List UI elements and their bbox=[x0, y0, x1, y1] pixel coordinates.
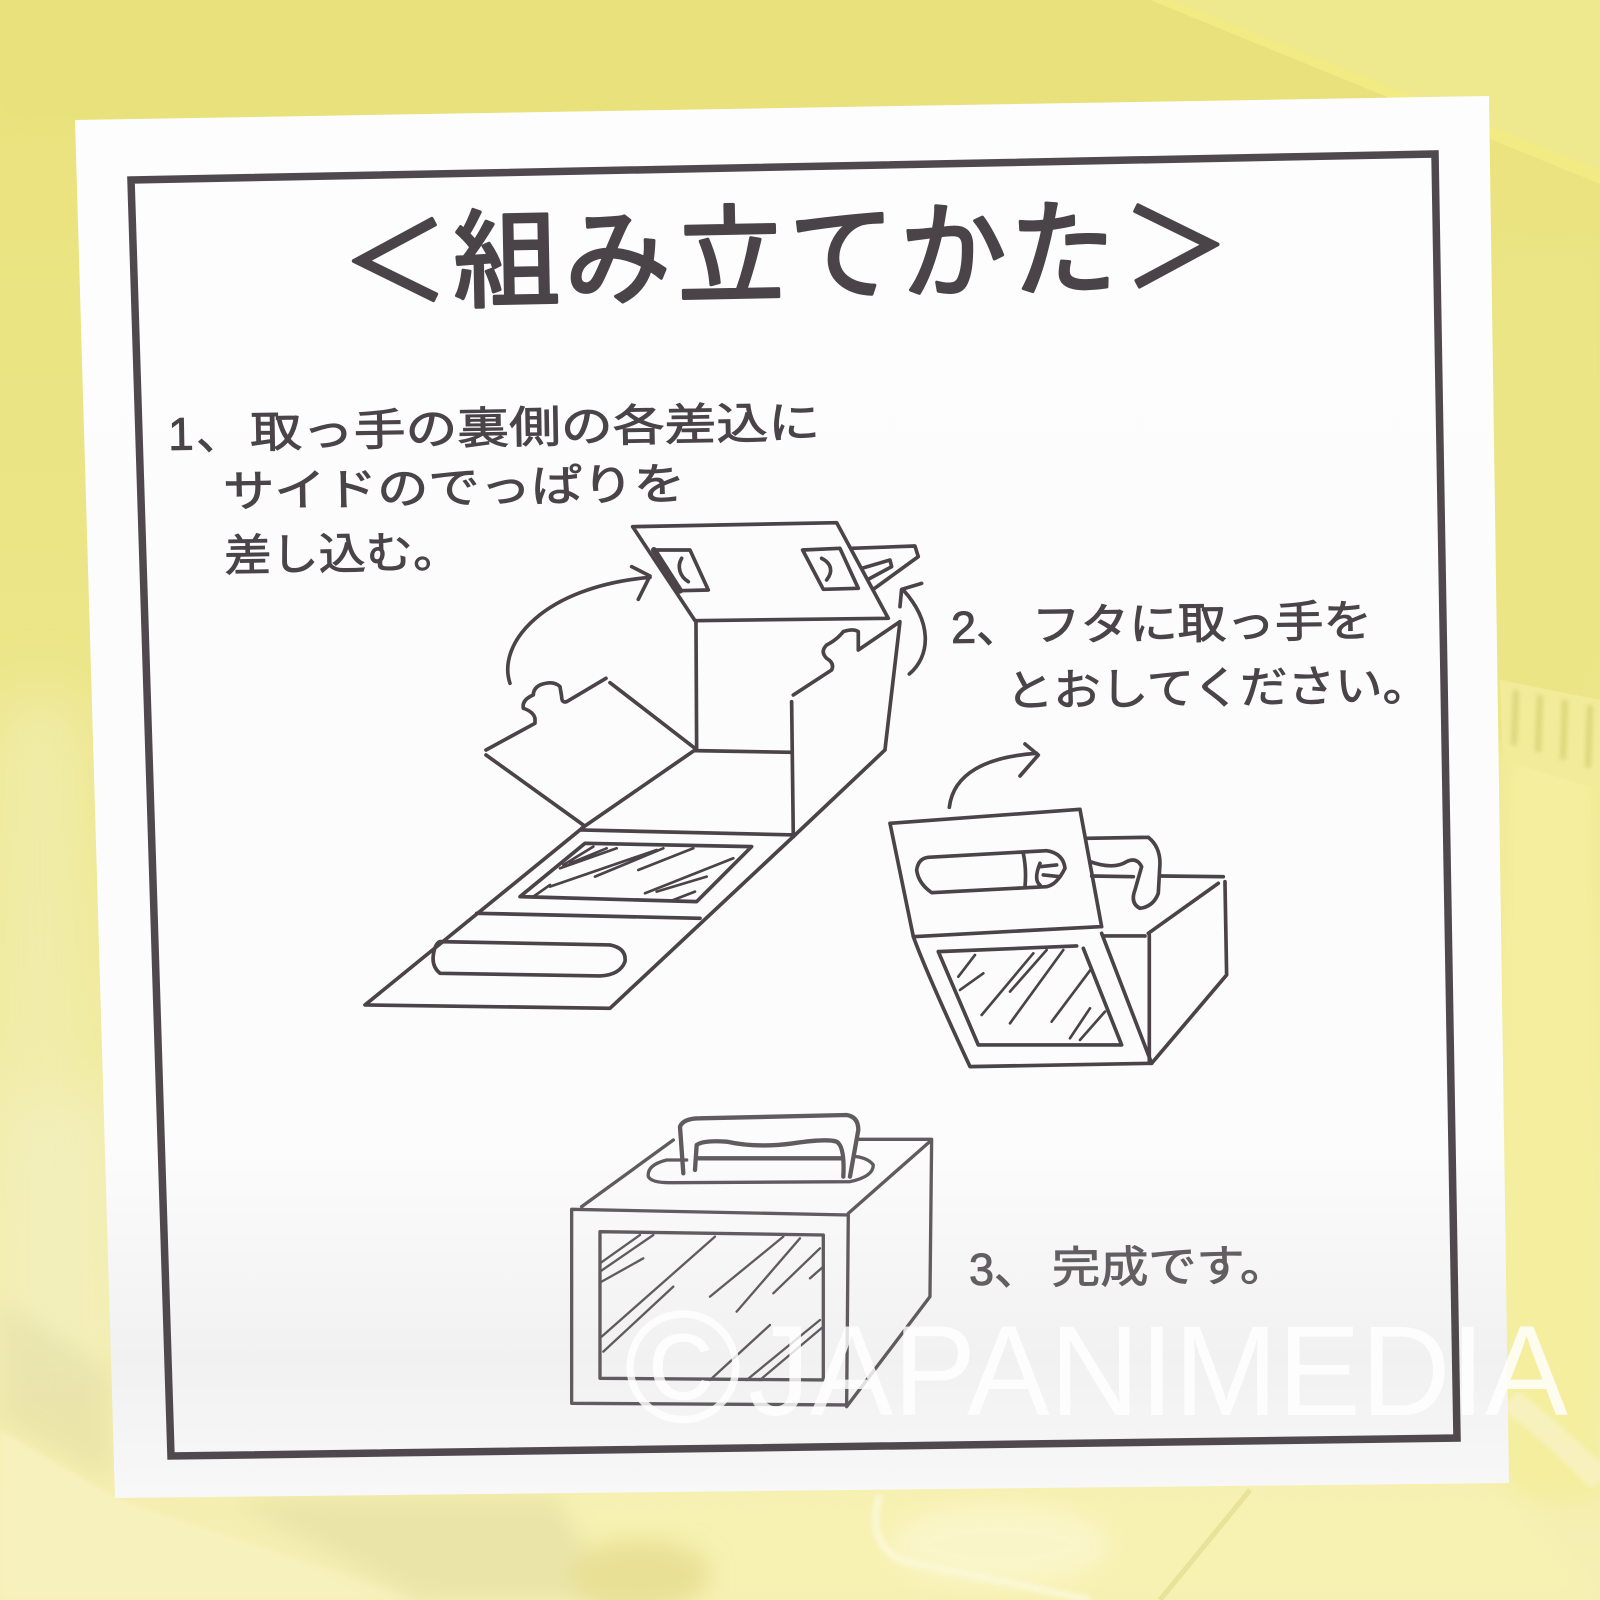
box outline bbox=[572, 1139, 932, 1407]
step 2 diagram: closing the lid bbox=[890, 744, 1227, 1067]
step 2 text: とおしてください。 bbox=[1006, 661, 1430, 716]
step 1 text: サイドのでっぱりを bbox=[223, 460, 685, 517]
window bbox=[600, 1232, 823, 1380]
step 2 text: 、 bbox=[976, 601, 1021, 653]
box body bbox=[1103, 882, 1227, 1063]
step 1 text: 取っ手の裏側の各差込に bbox=[250, 399, 820, 458]
frame border bbox=[131, 154, 1457, 1456]
handle bbox=[1087, 837, 1223, 908]
step 3 text: 完成です。 bbox=[1052, 1242, 1288, 1293]
step 1 diagram: unfolded box bbox=[365, 523, 925, 1008]
step 3 diagram: finished box bbox=[572, 1115, 932, 1407]
step 2 text: 2 bbox=[951, 602, 976, 653]
lid bbox=[890, 809, 1102, 937]
lid slot bbox=[917, 851, 1065, 893]
lid flap with handle slots bbox=[633, 523, 888, 621]
handle behind flap bbox=[852, 546, 918, 589]
box back wall and floor bbox=[580, 621, 795, 837]
window bbox=[938, 946, 1122, 1045]
step 2 text bbox=[951, 595, 1430, 717]
step 1 text: 差し込む。 bbox=[224, 528, 461, 581]
step 2 text: フタに取っ手を bbox=[1032, 597, 1372, 651]
step 1 text bbox=[168, 397, 823, 582]
step 3 text: 3 bbox=[969, 1244, 994, 1295]
watermark: © bbox=[624, 1277, 742, 1456]
step 3 text: 、 bbox=[994, 1243, 1039, 1295]
paper card bbox=[75, 96, 1509, 1498]
right tabbed flap bbox=[793, 622, 900, 837]
front panel bbox=[913, 933, 1152, 1067]
watermark: JAPANIMEDIA bbox=[748, 1300, 1569, 1443]
step 1 text: 、 bbox=[196, 407, 243, 460]
arrow: right flap up bbox=[900, 583, 925, 674]
arrow: left flap up bbox=[508, 567, 650, 683]
watermark bbox=[624, 1277, 1569, 1456]
arrow over lid bbox=[949, 744, 1038, 807]
window panel bbox=[520, 843, 752, 902]
step 1 text: 1 bbox=[168, 408, 194, 460]
left tabbed flap bbox=[486, 678, 695, 825]
lower panel with handle slot bbox=[365, 830, 793, 1008]
title: ＜組み立てかた＞ bbox=[341, 189, 1230, 324]
step 3 text bbox=[969, 1241, 1288, 1295]
handle bbox=[648, 1157, 873, 1183]
